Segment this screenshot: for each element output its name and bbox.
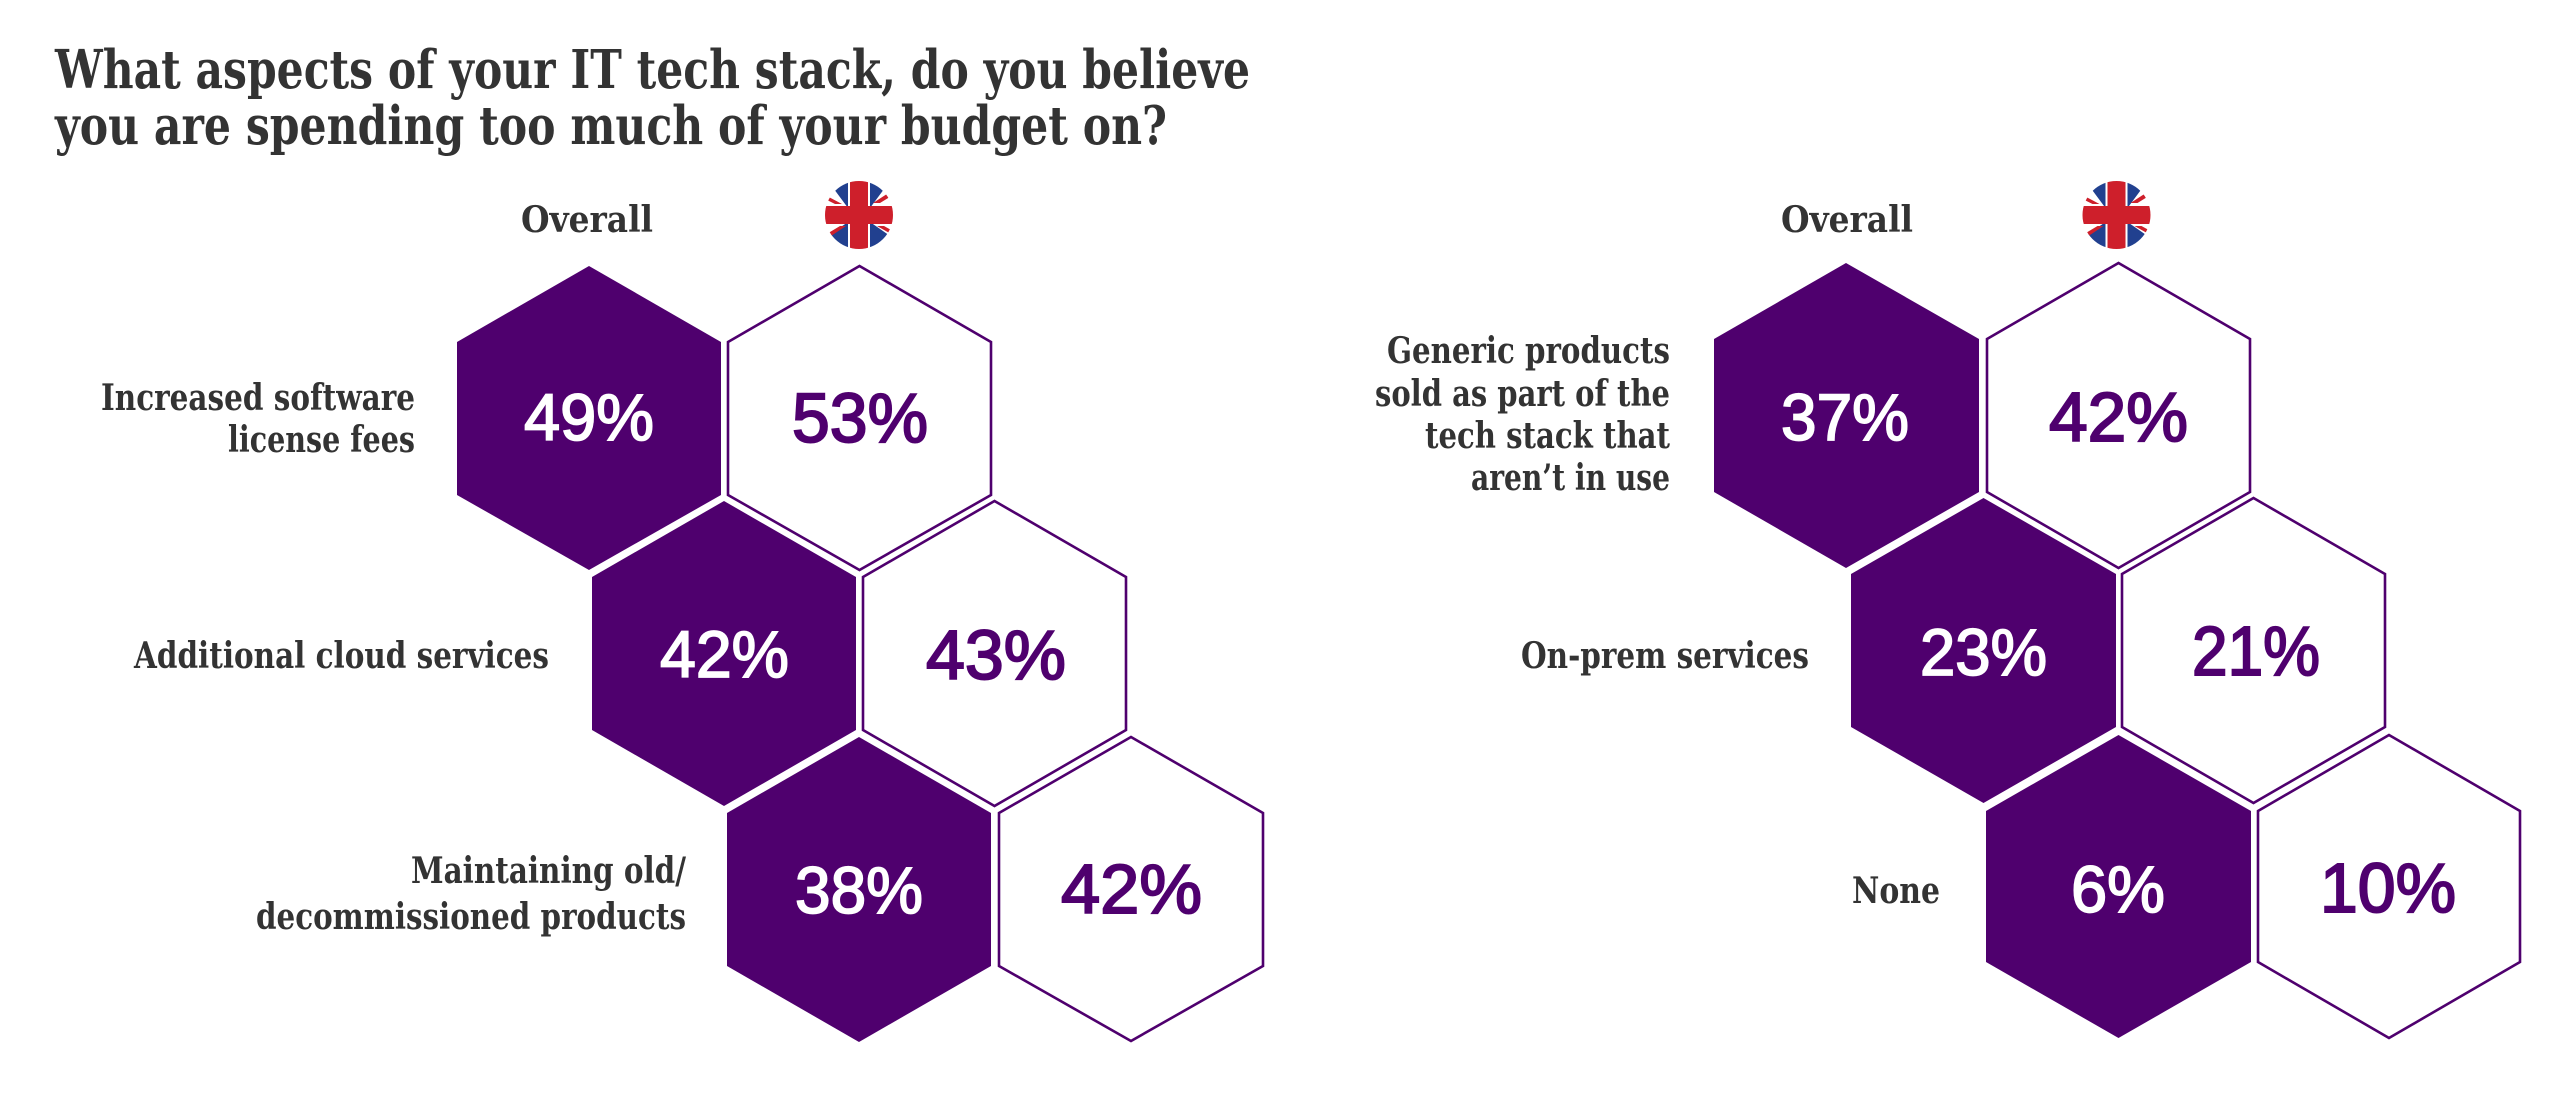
hexagon: UK 10% xyxy=(2258,735,2520,1038)
title: you are spending too much of your budget on? xyxy=(54,95,1167,157)
panel: left chart xyxy=(101,181,1263,1042)
title: What aspects of your IT tech stack, do you believe xyxy=(54,39,1250,101)
panel: right chart xyxy=(1375,181,2520,1038)
label: on-prem services: On-prem services xyxy=(1521,635,1809,677)
label: generic products: aren’t in use xyxy=(1471,457,1670,499)
hexagon: overall 38%: 38% xyxy=(795,853,923,927)
hexagon: overall 37%: 37% xyxy=(1781,380,1909,454)
hexagon: UK 42% xyxy=(1987,263,2250,568)
hexagon: overall 38% xyxy=(727,737,991,1042)
hexagon: UK 53% xyxy=(728,266,991,570)
hexagon: overall 23%: 23% xyxy=(1920,615,2047,689)
label: generic products: tech stack that xyxy=(1425,415,1670,457)
label: additional cloud services: Additional cloud services xyxy=(133,635,549,677)
hexagon: overall 23% xyxy=(1851,498,2116,803)
hexagon: overall 49%: 49% xyxy=(524,380,654,454)
heading: overall left: Overall xyxy=(521,199,653,241)
hexagon: UK 21% xyxy=(2122,498,2385,803)
icon: UK flag left xyxy=(825,181,893,249)
icon: UK flag right xyxy=(2082,181,2150,249)
label: increased software license fees: license fees xyxy=(228,419,415,461)
label: none: None xyxy=(1852,870,1940,912)
hexagon: UK 43% xyxy=(863,501,1126,806)
label: generic products: sold as part of the xyxy=(1375,373,1670,415)
hexagon: UK 21%: 21% xyxy=(2192,612,2320,690)
label: maintaining old/decommissioned products xyxy=(256,850,687,938)
label: increased software license fees xyxy=(101,377,415,461)
label: maintaining old/decommissioned products: decommissioned products xyxy=(256,896,686,938)
label: increased software license fees: Increased software xyxy=(101,377,415,419)
hexagon: overall 49% xyxy=(457,266,721,570)
hexagon: overall 42%: 42% xyxy=(660,617,789,691)
heading: overall right: Overall xyxy=(1781,199,1913,241)
hexagon: UK 42% xyxy=(999,737,1263,1041)
label: generic products xyxy=(1375,330,1670,499)
title xyxy=(54,39,1250,157)
label: maintaining old/decommissioned products: Maintaining old/ xyxy=(411,850,687,892)
hexagon: overall 42% xyxy=(592,501,856,806)
hexagon: overall 6% xyxy=(1986,735,2251,1038)
hexagon: UK 53%: 53% xyxy=(792,379,928,457)
label: generic products: Generic products xyxy=(1387,330,1670,372)
hexagon: UK 42%: 42% xyxy=(2049,378,2188,456)
hexagon: UK 42%: 42% xyxy=(1061,850,1202,928)
hexagon: UK 43%: 43% xyxy=(926,616,1066,694)
hexagon: overall 6%: 6% xyxy=(2071,852,2165,926)
hexagon: UK 10%: 10% xyxy=(2320,849,2456,927)
hexagon: overall 37% xyxy=(1714,263,1979,568)
